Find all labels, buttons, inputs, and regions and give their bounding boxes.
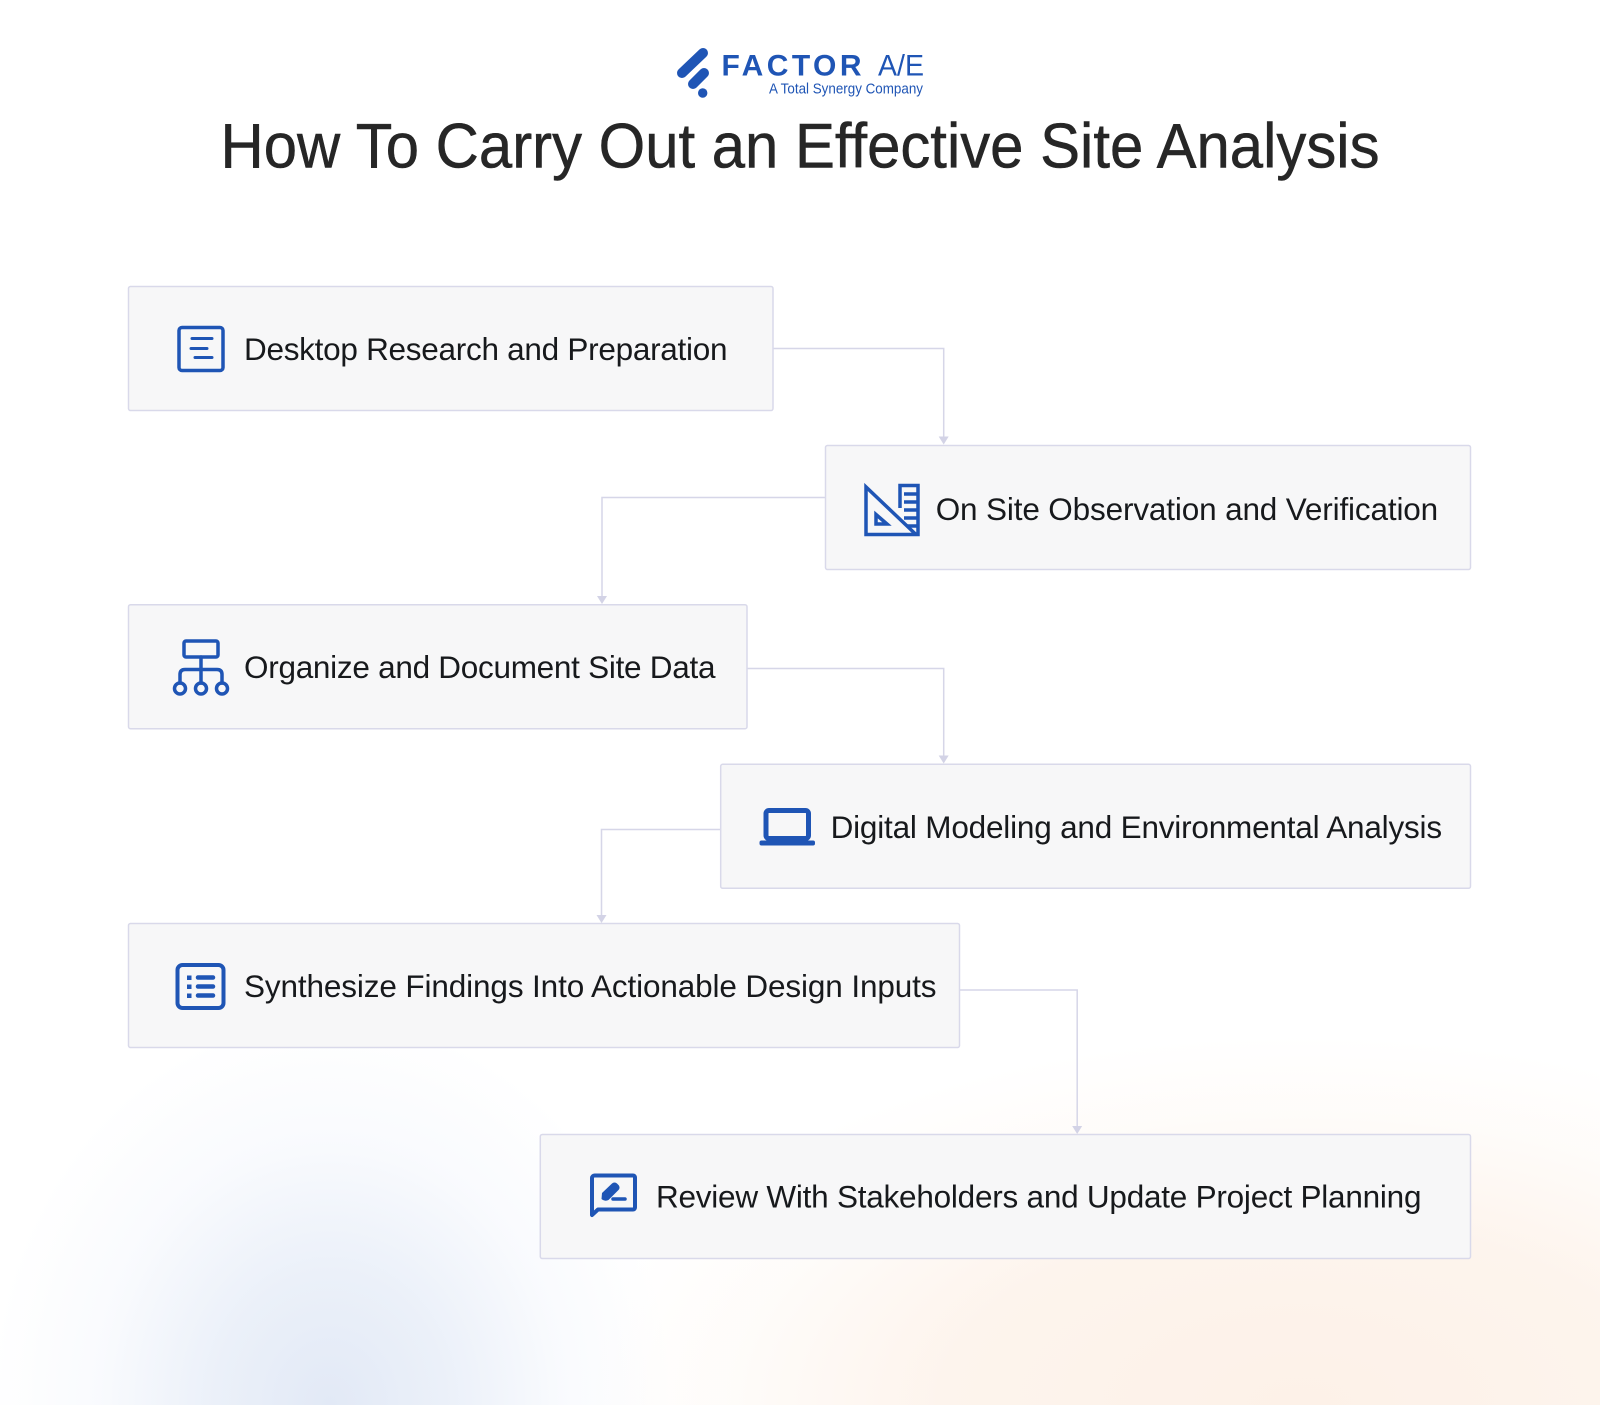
panel: step 6: [540, 1134, 1470, 1258]
panel: step 5: [128, 924, 960, 1048]
icon: laptop: [760, 810, 815, 846]
logo tagline: A Total Synergy Company: [769, 82, 924, 98]
label: step 1: Desktop Research and Preparation: [244, 331, 728, 367]
icon: org chart: [174, 641, 228, 694]
arrow: step 5 to step 6: [960, 990, 1082, 1134]
icon: list: [178, 965, 224, 1008]
logo wordmark: FACTOR: [722, 50, 862, 82]
label: step 2: On Site Observation and Verification: [936, 491, 1438, 527]
title: How To Carry Out an Effective Site Analysis: [220, 112, 1380, 182]
arrow: step 2 to step 3: [597, 498, 826, 604]
label: step 3: Organize and Document Site Data: [244, 649, 716, 685]
panel: step 4: [721, 764, 1470, 888]
label: step 5: Synthesize Findings Into Actionable Design Inputs: [244, 968, 936, 1004]
arrow: step 3 to step 4: [748, 668, 949, 764]
icon: document: [179, 328, 223, 370]
arrow: step 1 to step 2: [773, 348, 949, 444]
arrow: step 4 to step 5: [596, 830, 721, 923]
icon: logo mark: [682, 53, 707, 98]
label: step 4: Digital Modeling and Environmental Analysis: [831, 809, 1442, 845]
panel: step 3: [128, 605, 747, 729]
label: step 6: Review With Stakeholders and Update Project Planning: [656, 1178, 1422, 1214]
panel: step 2: [826, 446, 1470, 570]
logo suffix: A/E: [878, 50, 924, 82]
panel: step 1: [128, 286, 773, 410]
icon: chat with pen: [592, 1176, 635, 1215]
icon: set square and ruler: [866, 486, 918, 534]
logo: Factor A/E: [682, 50, 924, 98]
